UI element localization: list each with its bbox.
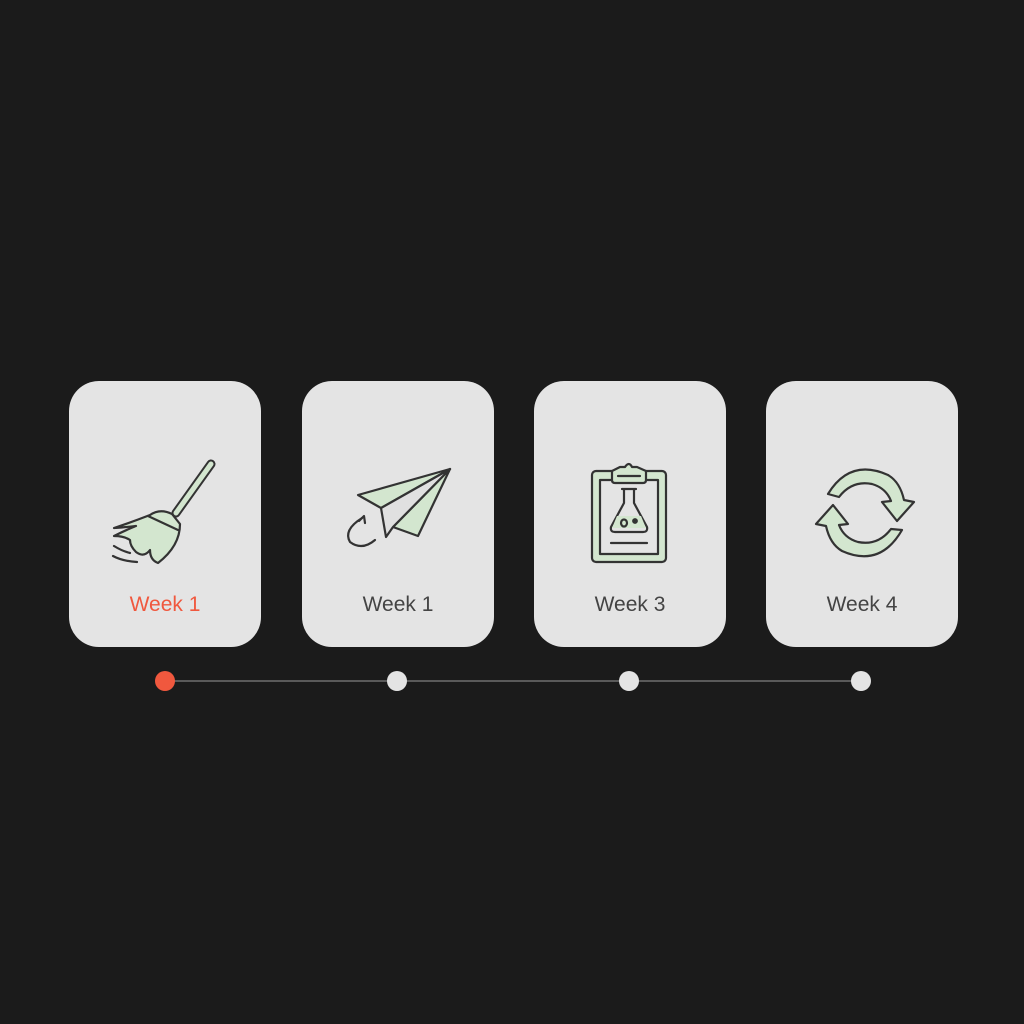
- timeline line: [165, 680, 861, 682]
- timeline dot 2: [387, 671, 407, 691]
- label: Week 3: Week 3: [595, 593, 665, 616]
- icon: broom: [113, 464, 211, 563]
- label: Week 4: Week 4: [827, 593, 898, 616]
- label: Week 1: Week 1: [363, 593, 433, 616]
- timeline dot 3: [619, 671, 639, 691]
- card 2: Week 1 paper plane: [302, 381, 494, 647]
- timeline dot 1 (active): [155, 671, 175, 691]
- icon: paper plane: [348, 469, 450, 546]
- card 3: Week 3 clipboard: [534, 381, 726, 647]
- timeline dot 4: [851, 671, 871, 691]
- label: Week 1: Week 1: [130, 593, 200, 616]
- icon: clipboard with flask: [592, 464, 666, 562]
- card 1: Week 1 broom: [69, 381, 261, 647]
- card 4: Week 4 cycle: [766, 381, 958, 647]
- icon: cycle arrows: [816, 470, 914, 556]
